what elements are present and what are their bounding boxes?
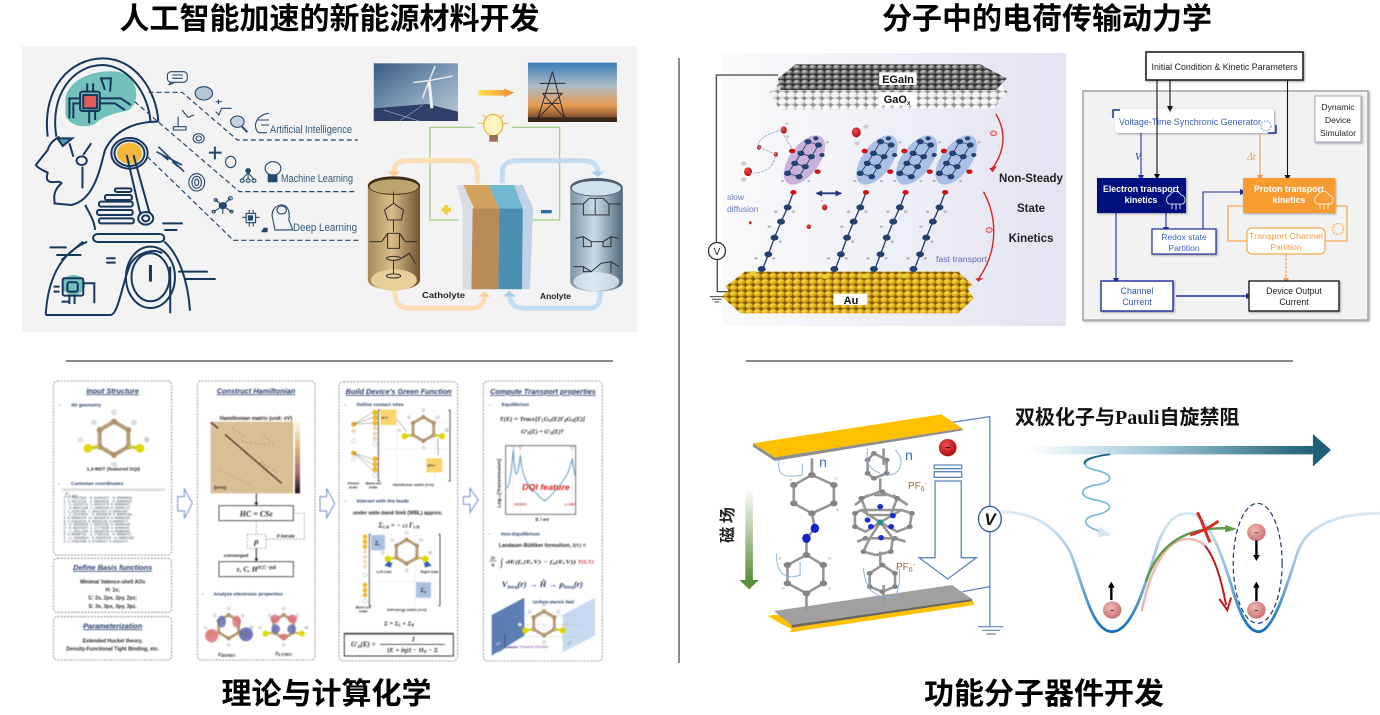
- card: input structure: -: [58, 481, 60, 487]
- card: construct Hamiltonian: converged: [224, 553, 248, 559]
- diagram: self-energy matrix: R: [424, 590, 427, 594]
- box: initial condition: [1146, 52, 1303, 80]
- card: input structure: H 0.00000723 -1.77561542 -0.00000717: [64, 533, 132, 537]
- section: Green function and transport: [339, 381, 602, 661]
- arrow: to Hamiltonian: [178, 488, 192, 518]
- title: functional molecular devices: 功能分子器件开发: [924, 669, 1164, 713]
- card: compute transport properties: a: [525, 429, 527, 433]
- box: dynamic device simulator: [1315, 96, 1361, 142]
- card: compute transport properties: T(E,V): [578, 559, 594, 566]
- diagram: contact site matrix: Hᴿⁱᵍʰᵗ: [428, 462, 436, 468]
- icon: voltmeter: [708, 242, 726, 260]
- card: compute transport properties: Equilibrium: [502, 402, 530, 408]
- chart: transmission spectrum: E / eV: [536, 517, 550, 523]
- equation: HC = CS epsilon: HC = CSε: [239, 509, 274, 518]
- card: construct Hamiltonian: Construct Hamiltonian: [217, 386, 296, 395]
- box: redox state partition: Redox state: [1161, 232, 1207, 242]
- illustration: redox flow battery: [368, 63, 623, 308]
- equation: retarded Green function: D: [357, 644, 361, 649]
- box: voltage-time generator: Voltage-Time Synchronic Generator: [1119, 117, 1261, 127]
- card: compute transport properties: T(E) = Trace[Γ: [500, 416, 542, 423]
- card: build device's Green function: [339, 382, 458, 661]
- label: magnetic field: 磁 场: [714, 507, 738, 543]
- equation: retarded Green function: 1: [412, 635, 415, 643]
- label: bipolaron heading: 双极化子与Pauli自旋禁阻: [1015, 401, 1239, 430]
- box: redox state partition: Partition: [1168, 243, 1200, 253]
- card: compute transport properties: D: [549, 432, 553, 436]
- label: delta t: Δt: [1246, 152, 1256, 163]
- label: slow diffusion: slow: [727, 192, 744, 202]
- card: input structure: S 2.21618372 0.00585120 0.00000377: [64, 519, 128, 523]
- label: Machine Learning: Machine Learning: [281, 173, 353, 185]
- card: compute transport properties: -: [489, 402, 491, 408]
- card: build device's Green function: L: [398, 624, 402, 628]
- panel: dynamic device simulator flowchart: [1083, 52, 1368, 320]
- card: input structure: H -2.19928933 1.99431182 0.00000108: [64, 523, 130, 527]
- card: compute transport properties: bneq: [564, 585, 574, 590]
- diagram: contact site matrix: Atomic: [347, 481, 359, 485]
- chart: transmission spectrum: Log₁₀[Transmission]: [497, 459, 503, 508]
- card: compute transport properties: V: [502, 579, 508, 589]
- orbitals: LUMO: ε: [275, 649, 278, 657]
- card: input structure: 3D geometry: [71, 402, 101, 408]
- card: compute transport properties: G: [567, 416, 572, 423]
- label: EGaIn: EGaIn: [882, 74, 914, 86]
- label: Deep Learning: Deep Learning: [293, 222, 357, 234]
- box: channel current: [1101, 281, 1173, 311]
- box: transport channel partition: Partition: [1270, 242, 1302, 252]
- diagram: self-energy matrix: Σ: [375, 541, 379, 547]
- label: GaOx: x: [907, 101, 911, 107]
- card: parameterization: Density-Functional Tight Binding, etc.: [66, 647, 160, 653]
- card: compute transport properties: Non-Equilibrium: [501, 532, 540, 538]
- card: compute transport properties: (r): [574, 579, 583, 589]
- diagram: contact site matrix: Basis-set: [366, 481, 381, 485]
- card: input structure: S 0.00000378 14.05430373 0.00000164: [64, 516, 130, 520]
- card: input structure: C -1.22215711 1.40631179 0.00000911: [64, 503, 130, 507]
- card: build device's Green function: = −: [389, 521, 403, 529]
- card: construct Hamiltonian: Analyze electronic properties: [213, 591, 283, 597]
- diagram: contact site matrix: order: [369, 486, 378, 490]
- card: define basis functions: [53, 558, 172, 612]
- panel: molecular junction kinetics: [708, 53, 1066, 326]
- card: compute transport properties: G: [521, 430, 525, 436]
- orbitals: LUMO: LUMO: [278, 652, 292, 657]
- label: n left: n: [819, 454, 827, 470]
- card: compute transport properties: D: [548, 419, 552, 423]
- box: device output current: Device Output: [1266, 286, 1322, 296]
- card: input structure: 16: [65, 492, 69, 495]
- card: input structure: Cartesian coordinates: [71, 481, 124, 487]
- label: n right: n: [905, 447, 913, 463]
- card: define basis functions: Minimal Valence-shell AOs: [80, 580, 145, 586]
- box: proton transport kinetics: kinetics: [1273, 195, 1305, 205]
- card: build device's Green function: -: [344, 499, 346, 505]
- diagram: uniform electric field: Uniform electric field: [533, 600, 574, 605]
- label: V: V: [1135, 152, 1143, 163]
- orbitals: HOMO: [203, 606, 253, 658]
- density matrix step: ρ: [253, 536, 259, 546]
- card: compute transport properties: L: [541, 419, 545, 423]
- label: PF6 lower: 6: [909, 567, 913, 574]
- panel: computational workflow: [53, 381, 602, 661]
- card: build device's Green function: Build Device's Green Function: [346, 387, 452, 396]
- equation: retarded Green function: (E) =: [361, 641, 376, 649]
- card: input structure: H -1.20311244 1.39569735 0.00000435: [64, 529, 130, 533]
- label: fast transport: fast transport: [936, 254, 988, 264]
- box: transport channel partition: [1247, 224, 1344, 254]
- card: build device's Green function: under wide-band limit (WBL) approx.: [353, 511, 443, 517]
- card: build device's Green function: + Σ: [401, 621, 412, 628]
- card: input structure: C -0.00241348 1.19995164 0.00000111: [64, 506, 130, 510]
- box: voltage-time generator: [1113, 109, 1276, 133]
- illustration: robot head with circuits: [36, 58, 216, 315]
- card: parameterization: Extended Huckel theory,: [83, 639, 143, 645]
- card: compute transport properties: (E,V)): [556, 559, 576, 566]
- box: transport channel partition: Transport Channel: [1249, 231, 1323, 241]
- density matrix step: [247, 534, 266, 548]
- label: voltage V: V: [984, 510, 997, 529]
- heatmap: Hamiltonian matrix: (n×n): [214, 485, 227, 491]
- card: input structure: C 2.33279734 -1.06848835 -0.00000438: [64, 499, 132, 503]
- card: input structure: C -2.32244412 -0.06549079 0.00000169: [64, 513, 132, 517]
- panel: functional molecular device: [714, 401, 1380, 634]
- chart: transmission spectrum: HOMO: [514, 502, 527, 507]
- card: construct Hamiltonian: Hamiltonian matrix (unit: eV): [220, 416, 292, 422]
- box: device output current: Current: [1279, 297, 1309, 307]
- card: compute transport properties: R: [564, 419, 567, 423]
- card: compute transport properties: L: [519, 562, 523, 566]
- equation: SCC result: SCC−full: [258, 566, 277, 571]
- label: Catholyte: Catholyte: [422, 290, 465, 300]
- label: PF6 lower: PF: [896, 562, 909, 573]
- card: compute transport properties: D: [570, 419, 574, 423]
- card: compute transport properties: bneq: [508, 585, 518, 590]
- box: electron transport kinetics: [1097, 178, 1186, 213]
- diagram: uniform electric field: ρᴿ: [566, 640, 572, 645]
- label: Au: Au: [844, 295, 858, 307]
- card: build device's Green function: L/R: [412, 525, 420, 530]
- illustration: EGaIn / Au junction: [710, 64, 1008, 313]
- diagram: contact site matrix: order: [349, 486, 358, 490]
- card: build device's Green function: R: [412, 624, 415, 628]
- label: Anolyte: Anolyte: [540, 291, 571, 301]
- diagram: uniform electric field: Transport direction: [519, 645, 548, 649]
- label: PF6 upper: PF: [908, 481, 921, 492]
- card: input structure: C 1.22347391 1.40415257 0.00001467: [64, 509, 128, 513]
- diagram: contact site matrix: [346, 408, 450, 490]
- card: compute transport properties: (E) = G: [530, 429, 549, 436]
- card: define basis functions: C: 2s, 2px, 2py, 2pz;: [88, 596, 137, 602]
- title: theory and computational chemistry: 理论与计算化学: [222, 669, 432, 713]
- card: define basis functions: Define Basis functions: [73, 563, 152, 572]
- box: electron transport kinetics: kinetics: [1125, 195, 1157, 205]
- equation: retarded Green function: G: [351, 641, 356, 649]
- box: channel current: Channel: [1121, 286, 1153, 296]
- card: compute transport properties: h: [492, 562, 495, 568]
- card: build device's Green function: Σ: [379, 521, 383, 529]
- card: input structure: 1,3-BDT: [65, 495, 78, 498]
- icon: voltmeter: V: [714, 247, 721, 258]
- equation: retarded Green function: r: [356, 640, 358, 645]
- label: Non-Steady State Kinetics: State: [1017, 203, 1045, 215]
- arrow: to transport: [463, 488, 478, 512]
- card: compute transport properties: (r) → Ĥ → ρ: [518, 579, 564, 589]
- card: compute transport properties: [483, 381, 602, 661]
- label: slow diffusion: diffusion: [727, 204, 759, 214]
- card: construct Hamiltonian: [197, 381, 315, 660]
- card: define basis functions: H: 1s;: [106, 588, 120, 594]
- card: compute transport properties: (E)†: [553, 429, 565, 436]
- equation: SCC result: ε, C, H: [237, 565, 258, 574]
- card: compute transport properties: (E,V) − f: [523, 559, 554, 566]
- card: parameterization: Parameterization: [83, 621, 143, 630]
- arrow: to Green function: [320, 488, 335, 518]
- equation: retarded Green function: (E + iη)I − H: [387, 647, 424, 654]
- card: construct Hamiltonian: -: [202, 591, 204, 597]
- diagram: self-energy matrix: Σ: [420, 588, 424, 594]
- card: parameterization: [53, 617, 172, 660]
- card: compute transport properties: G: [544, 416, 549, 423]
- card: build device's Green function: -: [344, 402, 346, 408]
- chart: transmission spectrum: LUMO: [565, 502, 577, 507]
- box: channel current: Current: [1122, 297, 1152, 307]
- card: input structure: H -0.00241037 1.17774039 0.00000401: [64, 526, 130, 530]
- card: construct Hamiltonian: if iterate: [277, 534, 295, 539]
- heatmap: Hamiltonian matrix: [211, 422, 300, 493]
- card: input structure: H 1.37557938 0.87108334 0.00023471: [64, 539, 128, 543]
- box: dynamic device simulator: Simulator: [1320, 128, 1356, 138]
- equation: retarded Green function: [344, 633, 453, 656]
- diagram: uniform electric field: ρᴸ: [496, 640, 501, 645]
- card: input structure: [53, 381, 172, 555]
- box: proton transport kinetics: Proton transport: [1254, 184, 1324, 194]
- diagram: self-energy matrix: Self-energy matrix (n×n): [387, 608, 427, 612]
- equation: retarded Green function: D: [423, 649, 427, 654]
- section: input, basis and parameterization plus Hamiltonian: [53, 381, 335, 660]
- card: compute transport properties: Landauer-Büttiker formulism, I(V) =: [499, 542, 586, 549]
- chart: transmission spectrum: DQI feature: [522, 482, 570, 492]
- diagram: self-energy matrix: L: [378, 543, 381, 547]
- orbitals: LUMO: [258, 606, 308, 657]
- card: input structure: 1,3-BDT (featured DQI): [87, 466, 140, 472]
- card: compute transport properties: -: [489, 532, 491, 538]
- card: compute transport properties: (E)Γ: [551, 416, 565, 423]
- card: build device's Green function: Σ = Σ: [384, 621, 399, 628]
- label: GaOx: GaO: [884, 94, 907, 106]
- equation: SCC result: [219, 562, 293, 577]
- orbitals: HOMO: HOMO: [221, 653, 236, 658]
- card: build device's Green function: i/2 Γ: [403, 521, 413, 529]
- orbitals: HOMO: ε: [218, 650, 221, 658]
- flow arrows: [1116, 80, 1347, 296]
- card: input structure: -: [58, 402, 60, 408]
- chart: transmission spectrum: [497, 446, 577, 523]
- card: compute transport properties: (E)]: [574, 416, 586, 423]
- label: PF6 upper: -: [925, 481, 928, 488]
- label: Artificial Intelligence: Artificial Intelligence: [270, 124, 352, 136]
- diagram: self-energy matrix: Left lead: [376, 570, 392, 574]
- diagram: self-energy matrix: order: [359, 610, 368, 614]
- card: compute transport properties: Compute Transport properties: [490, 387, 596, 396]
- diagram: self-energy matrix: Right lead: [420, 570, 438, 574]
- panel: AI and flow battery: [22, 46, 637, 332]
- card: build device's Green function: L/R: [382, 525, 389, 530]
- box: dynamic device simulator: Dynamic: [1321, 102, 1355, 112]
- card: compute transport properties: R: [552, 562, 557, 566]
- diagram: contact site matrix: Hamiltonian matrix (n×n): [393, 483, 435, 487]
- card: compute transport properties: D: [526, 432, 530, 436]
- label: PF6 upper: 6: [921, 486, 925, 493]
- card: input structure: H -1.73586824 -0.06503533 -0.00001338: [64, 536, 134, 540]
- card: compute transport properties: dE(f: [506, 560, 516, 566]
- icons and dashed guide lines: [135, 72, 359, 240]
- arrowheads: [1113, 106, 1290, 299]
- equation: retarded Green function: − Σ: [427, 647, 439, 654]
- card: input structure: C 1.76407834 -0.32262347 -0.00000939: [64, 496, 132, 500]
- card: build device's Green function: Interact with the leads: [357, 499, 409, 505]
- box: electron transport kinetics: Electron transport: [1103, 184, 1179, 194]
- box: redox state partition: [1152, 229, 1216, 254]
- panel background: [723, 53, 1066, 326]
- card: build device's Green function: Define contact sites: [357, 402, 404, 408]
- diagram: contact site matrix: Hᴸᵉᶠᵗ: [382, 416, 388, 420]
- diagram: self-energy matrix: [356, 531, 440, 614]
- card: compute transport properties: r: [549, 429, 551, 433]
- diagram: self-energy matrix: Basis-set: [356, 605, 371, 609]
- box: proton transport kinetics: [1243, 178, 1335, 213]
- box: device output current: [1249, 281, 1339, 311]
- card: input structure: Input Structure: [86, 386, 139, 395]
- card: compute transport properties: ∫: [499, 558, 504, 569]
- label: PF6 lower: -: [913, 562, 916, 569]
- box: dynamic device simulator: Device: [1325, 115, 1351, 125]
- illustration: molecular switching device: [739, 414, 1380, 634]
- label: Non-Steady State Kinetics: Kinetics: [1009, 233, 1053, 245]
- card: compute transport properties: 2e: [489, 555, 496, 561]
- box: initial condition: Initial Condition & Kinetic Parameters: [1152, 62, 1298, 72]
- card: define basis functions: S: 3s, 3px, 3py, 3pz.: [88, 604, 137, 610]
- diagram: uniform electric field: [492, 598, 595, 656]
- label: Non-Steady State Kinetics: Non-Steady: [999, 173, 1063, 185]
- equation: HC = CS epsilon: [219, 506, 293, 521]
